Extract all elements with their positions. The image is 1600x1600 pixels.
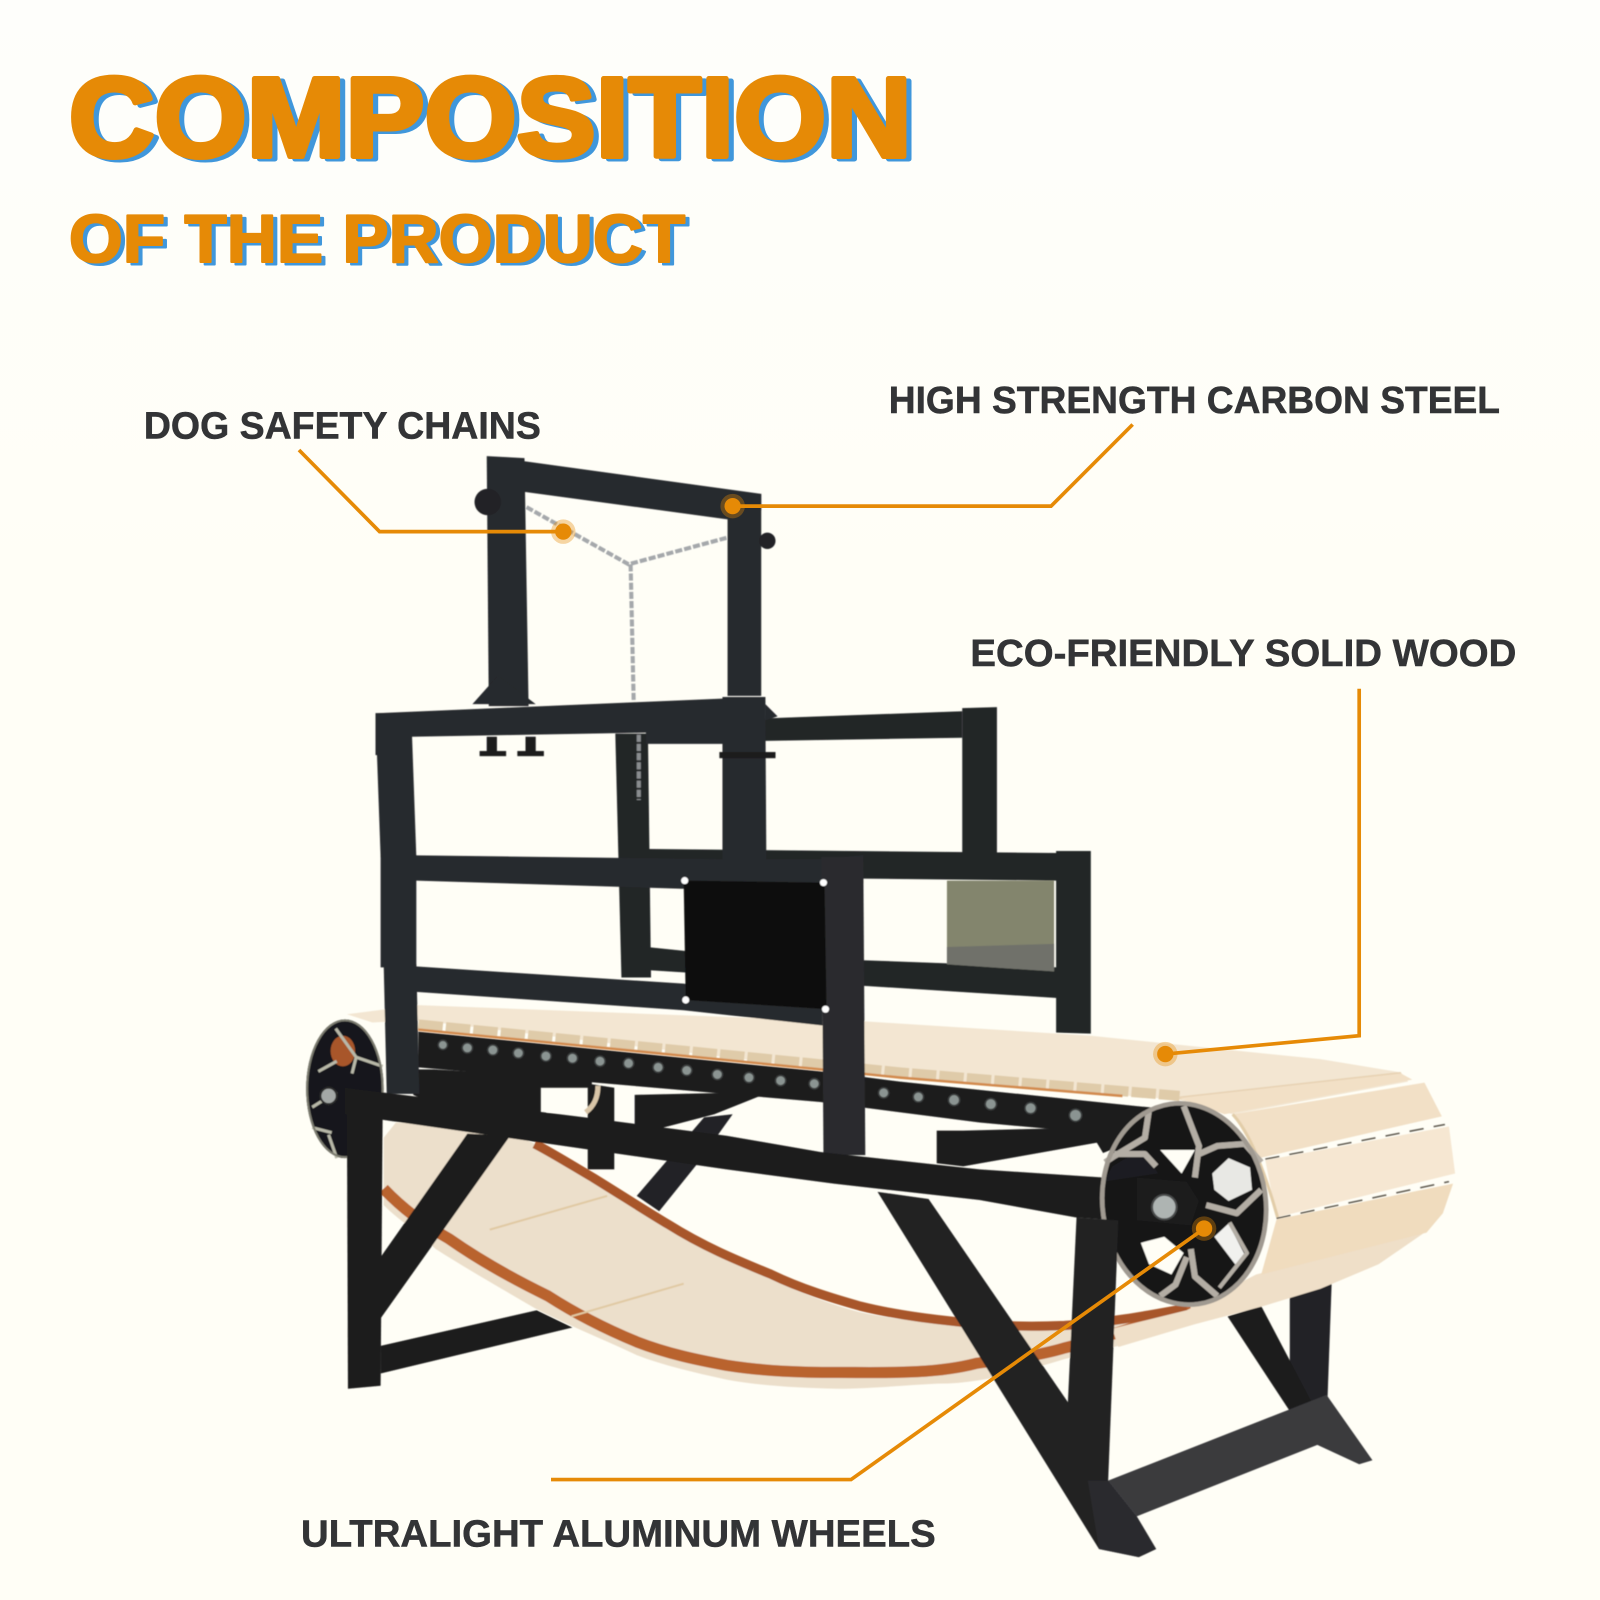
callout: high strength carbon steel	[720, 379, 1500, 518]
left aluminum wheel	[306, 1019, 384, 1158]
title: COMPOSITION	[74, 57, 917, 184]
callout: high strength carbon steel: HIGH STRENGTH CARBON STEEL	[889, 379, 1500, 421]
lower curved wood belt	[384, 1122, 1263, 1389]
subtitle: OF THE PRODUCT	[73, 204, 689, 279]
title: COMPOSITION	[69, 55, 912, 182]
callout: dog safety chains	[144, 404, 576, 544]
back foot bar	[381, 1310, 572, 1373]
callout: dog safety chains: DOG SAFETY CHAINS	[144, 404, 541, 446]
callout: eco-friendly solid wood: ECO-FRIENDLY SOLID WOOD	[970, 632, 1516, 674]
roller chain band with bolts	[418, 1032, 1204, 1153]
product illustration: dog treadmill	[306, 456, 1455, 1557]
right rear leg	[1228, 1284, 1332, 1414]
chain	[527, 507, 731, 800]
callout: ultralight aluminum wheels	[301, 1216, 1216, 1554]
cross blocks	[413, 1069, 1107, 1166]
callout: eco-friendly solid wood	[970, 632, 1516, 1066]
subtitle: OF THE PRODUCT	[69, 202, 685, 277]
callout: ultralight aluminum wheels: ULTRALIGHT ALUMINUM WHEELS	[301, 1512, 936, 1554]
wood drum slats	[1112, 1073, 1455, 1347]
front legs	[878, 1192, 1372, 1557]
far-side frame behind the belt	[588, 707, 1091, 1211]
glass panel	[947, 881, 1054, 971]
right aluminum wheel	[1089, 1093, 1279, 1315]
wood treadmill surface	[347, 1005, 1408, 1114]
left leg and brace	[347, 1112, 510, 1389]
main lower rail and axle arm	[320, 1088, 1199, 1226]
upper gate frame	[376, 456, 865, 1155]
black plate with bolts	[681, 877, 829, 1013]
